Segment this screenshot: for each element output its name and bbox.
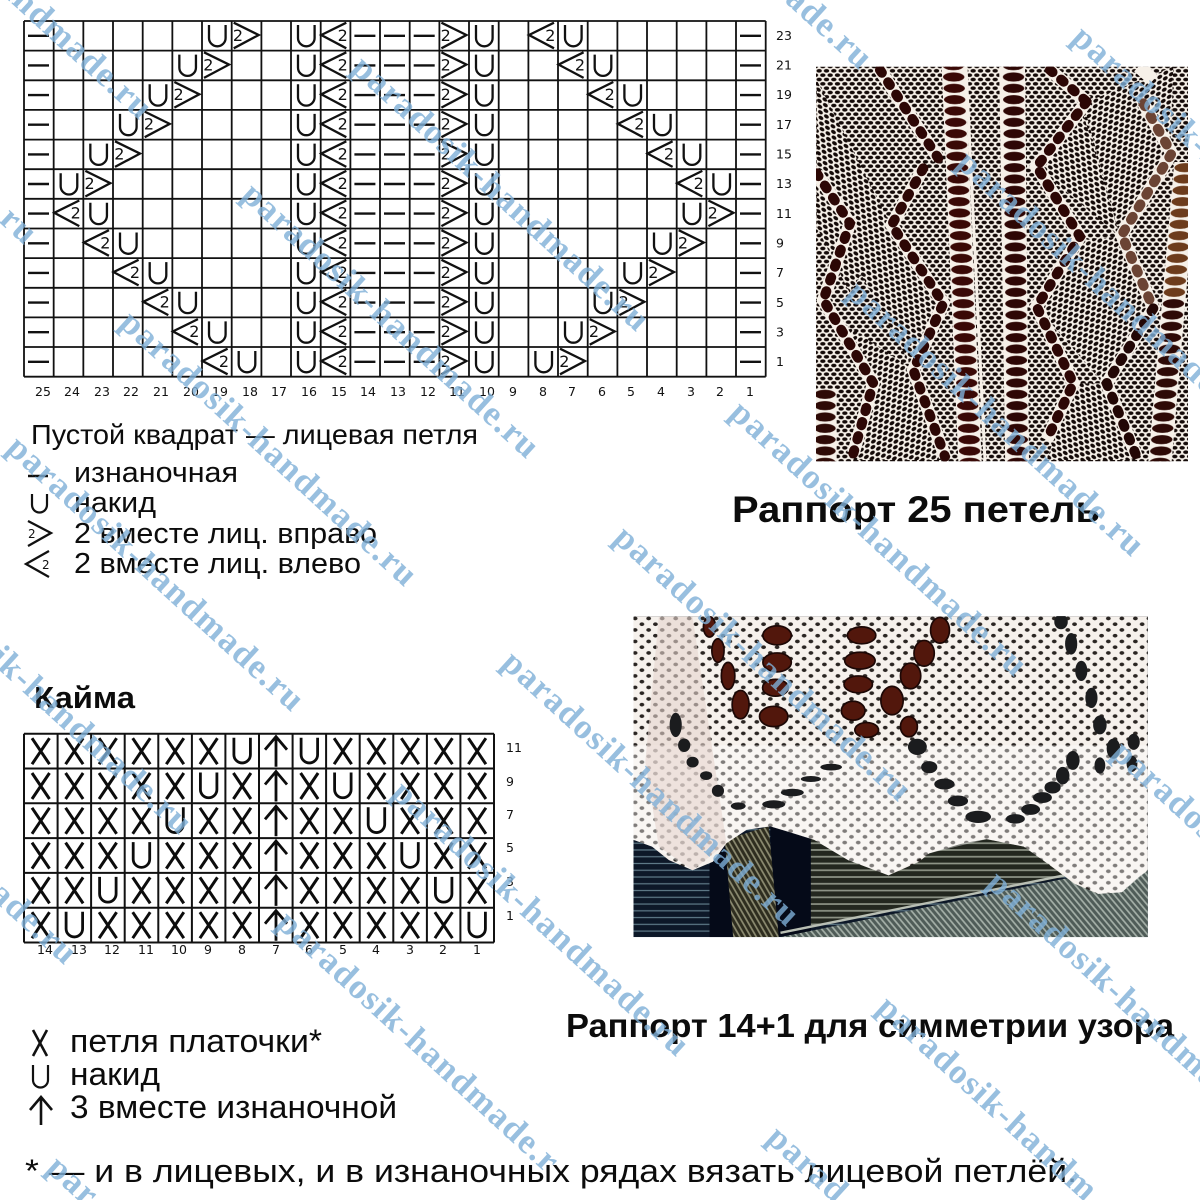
row numbers: 17 bbox=[776, 117, 792, 132]
row numbers: 21 bbox=[776, 58, 792, 72]
border row 7 bbox=[32, 806, 486, 836]
row numbers: 9 bbox=[776, 236, 784, 250]
row numbers: 5 bbox=[776, 295, 784, 310]
border column numbers: 13 bbox=[71, 942, 87, 957]
lace eyelets, dark bbox=[670, 614, 1140, 824]
watermarks: paradosik-handmade.ru bbox=[0, 427, 314, 719]
border row numbers: 1 bbox=[506, 908, 514, 923]
column numbers: 5 bbox=[627, 384, 635, 399]
watermarks: paradosik-handmade.ru bbox=[113, 302, 427, 594]
right edge eyelet column, brown bbox=[1162, 162, 1188, 298]
legend row: yarn over bbox=[32, 487, 156, 519]
legend row: purl: изнаночная bbox=[74, 457, 238, 489]
column numbers: 3 bbox=[687, 384, 695, 399]
legend row: yarn over bbox=[33, 1056, 160, 1092]
legend note: empty square: Пустой квадрат — лицевая петля bbox=[31, 419, 478, 450]
mesh sections following the diamonds bbox=[817, 67, 1173, 460]
border row 3 bbox=[32, 876, 486, 906]
border column numbers: 12 bbox=[104, 942, 120, 957]
diagonal eyelet chains: white borders bbox=[817, 67, 1172, 457]
border column numbers: 4 bbox=[372, 942, 380, 957]
chart: main knitting chart, 25 stitch repeat bbox=[24, 21, 792, 399]
diagonal eyelet chains: holes bbox=[817, 70, 1087, 457]
border row 9 bbox=[32, 772, 486, 802]
column numbers: 23 bbox=[94, 384, 110, 399]
border column numbers: 10 bbox=[171, 942, 187, 957]
jeans lower panel bbox=[780, 870, 1148, 937]
row numbers: 15 bbox=[776, 146, 792, 162]
column numbers: 2 bbox=[716, 384, 724, 399]
column numbers: 16 bbox=[301, 384, 317, 399]
column numbers: 8 bbox=[539, 384, 547, 399]
chart symbols: digit 2 inside decreases: 2222 bbox=[85, 174, 704, 193]
column numbers: 6 bbox=[598, 384, 606, 399]
chart symbols: digit 2 inside decreases bbox=[71, 26, 718, 371]
chart symbols: digit 2 inside decreases: 2222 bbox=[219, 352, 569, 371]
chart symbols: digit 2 inside decreases: 2222 bbox=[100, 233, 688, 252]
legend row: right decrease: 2 bbox=[28, 527, 36, 541]
chart symbols: diagonal left bbox=[54, 23, 259, 374]
chart symbols: digit 2 inside decreases: 2222 bbox=[114, 144, 674, 163]
lace background mesh bbox=[816, 67, 1188, 461]
column numbers: 24 bbox=[64, 384, 80, 399]
row numbers: 7 bbox=[776, 265, 784, 280]
border column numbers: 6 bbox=[305, 942, 313, 957]
border row 11 bbox=[32, 737, 486, 767]
border row numbers: 11 bbox=[506, 740, 522, 755]
row numbers: 11 bbox=[776, 206, 792, 221]
column numbers: 9 bbox=[509, 384, 517, 399]
chart symbols: digit 2 inside decreases: 2222 bbox=[233, 26, 555, 45]
column numbers: 10 bbox=[479, 384, 495, 399]
border column numbers: 2 bbox=[439, 942, 447, 957]
jeans hem highlight bbox=[780, 875, 1064, 933]
chart grid bbox=[24, 21, 766, 377]
column numbers: 7 bbox=[568, 384, 576, 399]
diagonal eyelet chain: brown, right side bbox=[1122, 103, 1172, 308]
border column numbers bbox=[37, 942, 481, 957]
border column numbers: 8 bbox=[238, 942, 246, 957]
legend row: three together purl: 3 вместе изнаночной bbox=[70, 1089, 397, 1125]
vertical eyelet columns bbox=[942, 67, 1029, 461]
border row numbers: 9 bbox=[506, 774, 514, 789]
legend row: left decrease: 2 bbox=[42, 558, 50, 572]
border column numbers: 11 bbox=[138, 942, 154, 957]
chart: border knitting chart bbox=[24, 734, 522, 957]
photo: lace pattern swatch bbox=[813, 67, 1198, 461]
column numbers: 22 bbox=[123, 384, 139, 399]
column numbers: 18 bbox=[242, 384, 258, 399]
footnote: * — и в лицевых, и в изнаночных рядах вязать лицевой петлёй. bbox=[25, 1153, 1077, 1189]
row numbers: 23 bbox=[776, 28, 792, 43]
column numbers: 11 bbox=[449, 384, 465, 399]
chart symbols: digit 2 inside decreases: 2222 bbox=[71, 204, 718, 223]
column numbers bbox=[35, 384, 754, 399]
row numbers: 19 bbox=[776, 87, 792, 102]
diagonal eyelet chain: dark, lower right bbox=[1107, 308, 1153, 457]
column numbers: 14 bbox=[360, 384, 376, 399]
lace pink tinted left area bbox=[645, 617, 726, 870]
watermarks: paradosik-handmade.ru bbox=[385, 772, 699, 1064]
column numbers: 19 bbox=[212, 384, 228, 399]
column numbers: 4 bbox=[657, 384, 665, 399]
border column numbers: 9 bbox=[204, 942, 212, 957]
border row numbers: 7 bbox=[506, 807, 514, 822]
white rib lines by the central columns bbox=[966, 67, 1007, 461]
border column numbers: 14 bbox=[37, 942, 53, 957]
chart symbols: fixed columns bbox=[28, 23, 761, 374]
border row 1 bbox=[32, 911, 485, 941]
right edge eyelet column, dark bbox=[1148, 298, 1186, 461]
border row numbers: 3 bbox=[506, 874, 514, 889]
border column numbers: 1 bbox=[473, 942, 481, 957]
row numbers: 1 bbox=[776, 354, 784, 369]
lace border body bbox=[633, 616, 1148, 894]
column numbers: 20 bbox=[183, 384, 199, 399]
column numbers: 1 bbox=[746, 384, 754, 399]
legend row: garter stitch: петля платочки* bbox=[70, 1023, 322, 1059]
chart symbols: digit 2 inside decreases: 2222 bbox=[144, 115, 644, 134]
column numbers: 12 bbox=[420, 384, 436, 399]
lace whiter lower part bbox=[633, 745, 1148, 894]
heading: repeat 14+1: Раппорт 14+1 для симметрии узора bbox=[566, 1007, 1175, 1044]
left edge eyelet column bbox=[813, 389, 837, 461]
watermarks: paradosik-handmade.ru bbox=[840, 272, 1154, 564]
heading: border: Кайма bbox=[34, 680, 136, 715]
border column numbers: 3 bbox=[406, 942, 414, 957]
legend row: right decrease: 2 вместе лиц. вправо bbox=[74, 518, 377, 550]
row numbers bbox=[776, 28, 792, 369]
column numbers: 15 bbox=[331, 384, 347, 399]
watermarks: paradosik-handmade.ru bbox=[495, 642, 809, 934]
border chart grid bbox=[24, 734, 494, 942]
border row numbers: 5 bbox=[506, 840, 514, 855]
chart symbols: digit 2 inside decreases: 2222 bbox=[189, 322, 599, 341]
column numbers: 17 bbox=[271, 384, 287, 399]
chart symbols: diagonal right bbox=[529, 23, 733, 374]
row numbers: 13 bbox=[776, 176, 792, 191]
watermarks: paradosik-handmade.ru bbox=[723, 392, 1037, 684]
jeans background bbox=[633, 616, 1148, 937]
row numbers: 3 bbox=[776, 324, 784, 340]
watermarks: paradosik-handmade.ru bbox=[607, 517, 921, 809]
chart symbols: digit 2 inside decreases: 2222 bbox=[203, 55, 585, 74]
chart symbols: digit 2 inside decreases: 2222 bbox=[130, 263, 658, 282]
legend row: left decrease: 2 вместе лиц. влево bbox=[74, 548, 361, 580]
column numbers: 13 bbox=[390, 384, 406, 399]
chart symbols: digit 2 inside decreases: 2222 bbox=[174, 85, 615, 104]
watermarks: paradosik-handmade.ru bbox=[235, 174, 549, 466]
heading: repeat 25 stitches: Раппорт 25 петель bbox=[732, 489, 1100, 530]
watermarks: paradosik-handmade.r bbox=[270, 902, 568, 1180]
border column numbers: 7 bbox=[272, 942, 280, 957]
legend row: yarn over: накид bbox=[74, 487, 156, 519]
border row numbers bbox=[506, 740, 522, 923]
column numbers: 25 bbox=[35, 384, 51, 399]
border column numbers: 5 bbox=[339, 942, 347, 957]
jeans belt loop bbox=[725, 826, 779, 937]
column numbers: 21 bbox=[153, 384, 169, 399]
watermarks: paradosik-handmade.ru bbox=[345, 47, 659, 339]
photo: lace border on jeans bbox=[633, 614, 1148, 937]
legend: border chart symbols bbox=[30, 1023, 397, 1125]
jeans dark shadow areas bbox=[710, 820, 811, 937]
lace eyelets, red-brown bbox=[703, 617, 949, 737]
border row 5 bbox=[32, 841, 486, 871]
legend: main chart symbols bbox=[26, 419, 478, 580]
jeans olive folded section bbox=[811, 833, 1071, 926]
chart symbols: digit 2 inside decreases: 2222 bbox=[160, 293, 629, 312]
legend row: yarn over: накид bbox=[70, 1056, 160, 1092]
